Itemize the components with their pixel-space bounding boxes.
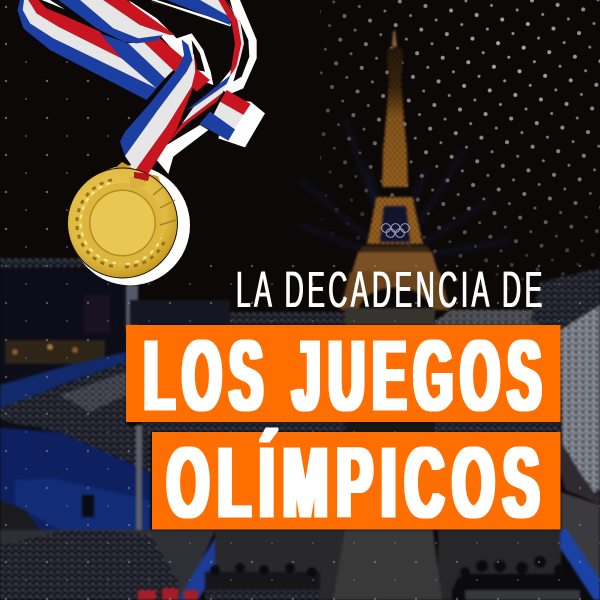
ribbon: top band <box>58 0 175 43</box>
icon: tricolor medal ribbon <box>17 0 251 175</box>
icon: gold medal <box>67 162 178 278</box>
ribbon: long left band <box>17 0 157 100</box>
background: night sky with drone light dots <box>4 0 600 290</box>
sticker: shadow gaps between outline and ribbon <box>192 20 249 82</box>
background: stadium crowd <box>0 258 600 600</box>
ribbon: top-right band <box>167 0 244 77</box>
ribbon: front band to medal <box>120 39 197 175</box>
background: light beams around the tower <box>300 120 510 262</box>
background: confetti sparkle over the crowd <box>0 262 600 600</box>
sticker: white cut-out outline behind medal and ribbon <box>70 0 265 285</box>
ribbon: loop end <box>199 90 251 141</box>
illustration: Eiffel Tower with Olympic rings <box>340 30 450 310</box>
ribbon: rear band <box>100 33 210 92</box>
ribbon: gap between long and top bands <box>38 0 100 32</box>
heading line: LA DECADENCIA DE: LA DECADENCIA DE <box>236 261 546 318</box>
banner: LOS JUEGOS: LOS JUEGOS <box>144 319 549 432</box>
banner: OLÍMPICOS: OLÍMPICOS <box>167 427 548 539</box>
ribbon: right band <box>164 75 231 147</box>
medal laurel wreath <box>77 180 165 267</box>
icon: Olympic rings <box>382 224 409 237</box>
medal sun-ray facets <box>142 175 176 225</box>
